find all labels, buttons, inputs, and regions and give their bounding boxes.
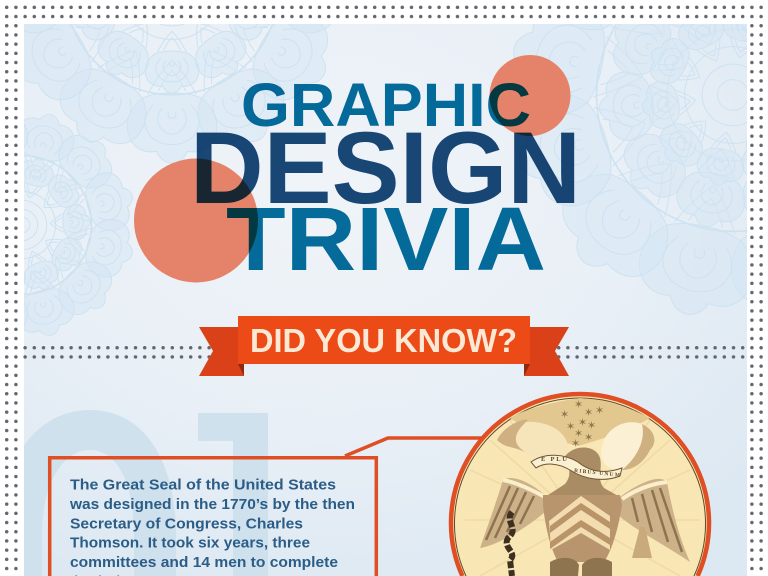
big watermark number 01 <box>0 410 268 576</box>
callout text: committees and 14 men to complete <box>70 555 338 571</box>
title line: TRIVIA: TRIVIA <box>226 190 546 290</box>
sun rays <box>465 420 700 576</box>
stars: ✶ <box>574 399 583 411</box>
left wing <box>480 478 545 548</box>
callout text: was designed in the 1770’s by the then <box>69 497 355 513</box>
banner text: E PLU <box>541 456 567 463</box>
stars: ✶ <box>566 421 575 433</box>
title <box>190 71 581 290</box>
eagle head and neck <box>548 448 616 495</box>
stars: ✶ <box>584 432 593 444</box>
shield <box>543 495 622 562</box>
seal disc <box>451 394 709 576</box>
arrows <box>632 527 652 558</box>
callout text: Secretary of Congress, Charles <box>70 516 303 532</box>
title line: GRAPHIC: GRAPHIC <box>241 71 531 139</box>
ribbon left tail <box>199 327 244 376</box>
stars: ✶ <box>587 420 596 432</box>
connector line <box>345 438 484 456</box>
ribbon banner <box>199 316 569 376</box>
decorative mandalas <box>0 0 768 365</box>
callout text: The Great Seal of the United States <box>70 478 336 494</box>
olive branch <box>507 512 513 576</box>
stars: ✶ <box>584 407 593 419</box>
ribbon right tail <box>524 327 569 376</box>
seal illustration: RIBUS UNUM <box>574 468 621 479</box>
stars: ✶ <box>571 438 580 450</box>
dotted divider <box>21 343 748 361</box>
ribbon text: DID YOU KNOW? <box>250 322 517 359</box>
stars: ✶ <box>560 409 569 421</box>
seal illustration <box>451 394 709 576</box>
right wing <box>618 479 690 562</box>
clouds <box>510 398 650 446</box>
decorative circle: right <box>490 55 570 136</box>
banner <box>531 455 622 479</box>
callout box <box>50 458 376 576</box>
stars <box>561 400 603 447</box>
stars: ✶ <box>574 428 583 440</box>
stars: ✶ <box>578 417 587 429</box>
stars: ✶ <box>595 405 604 417</box>
ribbon main band <box>238 316 530 364</box>
decorative circle: left <box>134 158 258 282</box>
title line: DESIGN: DESIGN <box>190 111 581 225</box>
callout text <box>69 478 355 576</box>
eagle legs <box>550 558 612 576</box>
callout text: Thomson. It took six years, three <box>70 536 310 552</box>
